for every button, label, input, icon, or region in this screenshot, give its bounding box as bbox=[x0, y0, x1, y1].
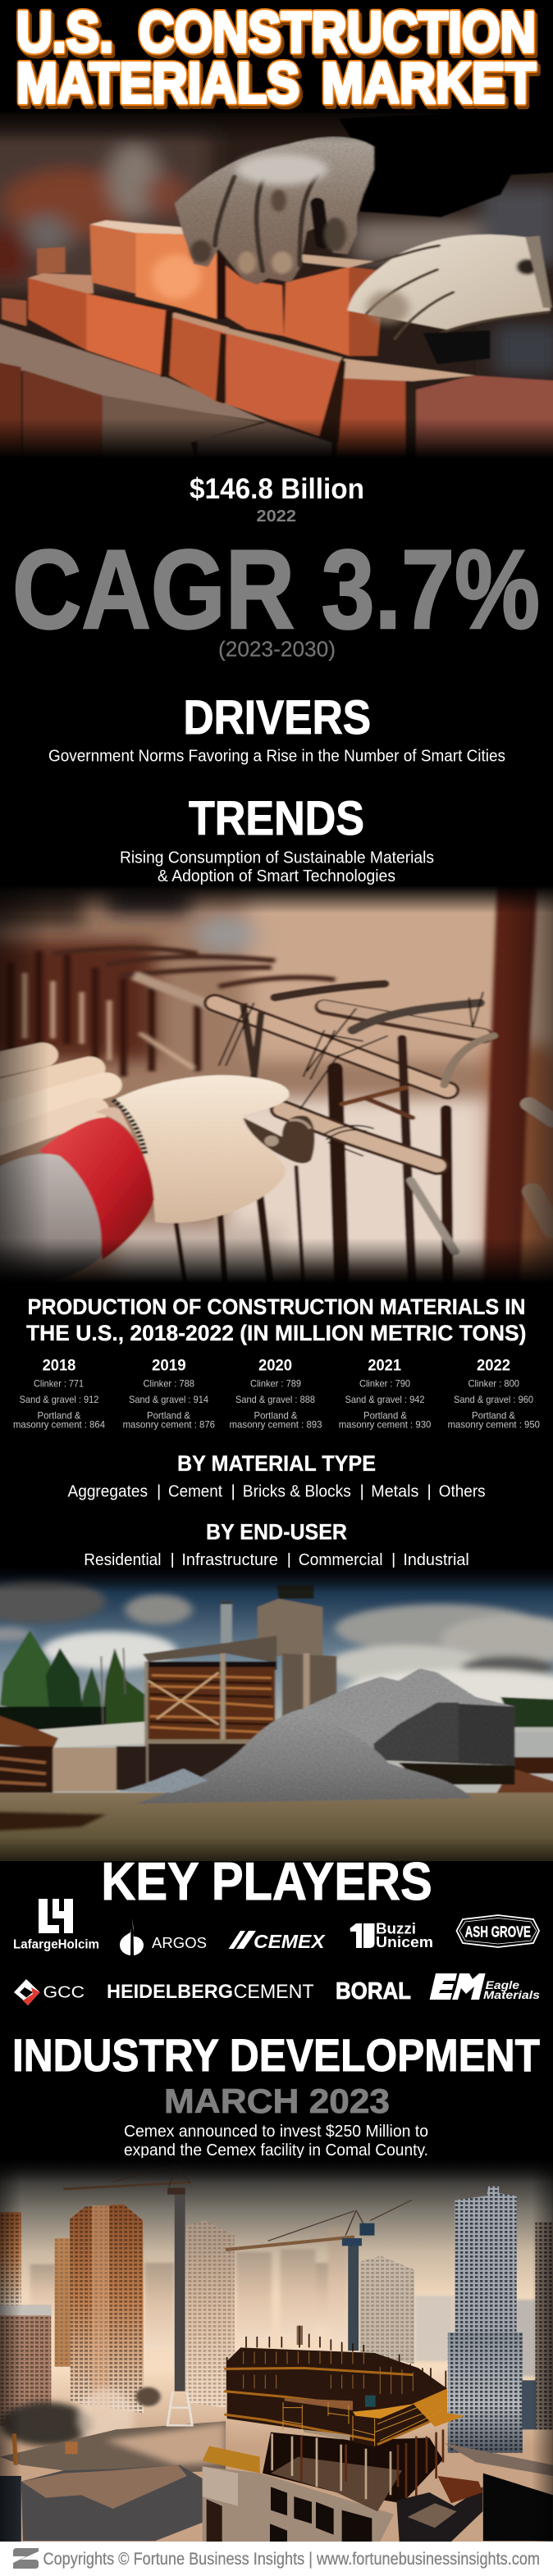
icon: Fortune Business Insights logo bbox=[13, 2548, 39, 2569]
open storey bbox=[263, 2433, 443, 2503]
end-user list: | bbox=[287, 1550, 291, 1569]
column: 2021 bbox=[339, 1358, 432, 1431]
logo: GCC: GCC bbox=[43, 1984, 85, 2002]
logo: Ash Grove bbox=[456, 1915, 539, 1947]
logo: Buzzi Unicem: Buzzi bbox=[376, 1921, 416, 1937]
right towers bbox=[455, 2187, 517, 2334]
development text: Cemex announced to invest $250 Million to bbox=[124, 2122, 428, 2141]
material type list: Aggregates bbox=[67, 1482, 148, 1501]
end-user list: Residential bbox=[84, 1550, 161, 1569]
trends text: Rising Consumption of Sustainable Materials bbox=[120, 848, 434, 867]
road bbox=[0, 2421, 226, 2476]
title: U.S. bbox=[19, 3, 116, 67]
development text: expand the Cemex facility in Comal County. bbox=[124, 2141, 428, 2160]
material type list: | bbox=[359, 1482, 364, 1501]
mid right tower bbox=[359, 2256, 414, 2364]
material type list: Cement bbox=[168, 1482, 222, 1501]
clouds bbox=[0, 1580, 553, 1708]
concrete base bbox=[203, 2466, 394, 2542]
heading: trends: TRENDS bbox=[189, 792, 364, 845]
right buildings bbox=[515, 1732, 553, 1757]
logo: Buzzi Unicem bbox=[350, 1921, 433, 1950]
drivers text: Government Norms Favoring a Rise in the Number of Smart Cities bbox=[48, 746, 505, 766]
material type list: | bbox=[231, 1482, 235, 1501]
left log stack bbox=[0, 1714, 58, 1749]
glove bbox=[117, 1075, 290, 1223]
far cage bbox=[11, 949, 335, 1076]
title: MATERIALS bbox=[16, 51, 299, 115]
heading: production chart: THE U.S., 2018-2022 (IN MILLION METRIC TONS) bbox=[26, 1321, 527, 1345]
low buildings bbox=[21, 2465, 203, 2541]
material type list: Bricks & Blocks bbox=[243, 1482, 351, 1501]
photo: material yard with gravel pile bbox=[0, 1568, 553, 1861]
trends text: & Adoption of Smart Technologies bbox=[158, 867, 395, 885]
silo tower bbox=[258, 1599, 322, 1656]
photo: gloved hands laying bricks bbox=[0, 102, 553, 480]
column: 2022: Portland & bbox=[472, 1410, 515, 1422]
gravel pile back bbox=[303, 1668, 515, 1748]
brick gaps bbox=[217, 248, 226, 319]
photo: gloved hand tying rebar bbox=[0, 880, 553, 1312]
market size value: $146.8 Billion bbox=[190, 473, 364, 505]
column: 2022 bbox=[448, 1358, 540, 1431]
hazy towers bbox=[30, 2228, 536, 2376]
dust and trees bbox=[0, 2402, 92, 2446]
logo: Argos bbox=[120, 1918, 207, 1955]
right glove bbox=[347, 234, 550, 330]
end-user list: | bbox=[171, 1550, 175, 1569]
heading: drivers: DRIVERS bbox=[184, 691, 371, 744]
trends text bbox=[120, 848, 434, 885]
column: 2021: Clinker : 790 bbox=[359, 1378, 410, 1390]
material type list: Others bbox=[439, 1482, 486, 1501]
column: 2019: 2019 bbox=[152, 1358, 186, 1375]
white shed bbox=[35, 1722, 144, 1748]
logo: GCC bbox=[14, 1979, 85, 2005]
gravel pile front bbox=[135, 1708, 473, 1804]
material type list: Metals bbox=[371, 1482, 418, 1501]
column: 2020 bbox=[230, 1358, 322, 1431]
left glove bbox=[175, 137, 374, 284]
red cuff bbox=[39, 1117, 154, 1260]
column: 2018: 2018 bbox=[43, 1358, 75, 1375]
CAGR period: (2023-2030) bbox=[218, 638, 336, 661]
logo: Argos: ARGOS bbox=[152, 1934, 207, 1951]
column: 2021: Sand & gravel : 942 bbox=[345, 1394, 425, 1405]
development text bbox=[124, 2122, 428, 2160]
logo: Eagle Materials: Eagle bbox=[486, 1978, 519, 1991]
end-user list bbox=[84, 1550, 469, 1569]
rebar bbox=[176, 984, 553, 1295]
left towers bbox=[0, 2212, 21, 2305]
post bbox=[483, 880, 537, 1295]
logo: Buzzi Unicem: Unicem bbox=[376, 1934, 433, 1950]
light gaps bbox=[244, 2351, 413, 2394]
wood stacks bbox=[149, 1667, 275, 1740]
column: 2022: Clinker : 800 bbox=[468, 1378, 519, 1390]
end-user list: Industrial bbox=[403, 1550, 469, 1569]
column: 2018: Portland & bbox=[38, 1410, 81, 1422]
column: 2020: Portland & bbox=[254, 1410, 298, 1422]
column: 2019: masonry cement : 876 bbox=[123, 1419, 215, 1431]
end-user list: Infrastructure bbox=[181, 1550, 278, 1569]
title: U.S. bbox=[16, 0, 113, 64]
ground bbox=[0, 1792, 553, 1861]
chimney bbox=[221, 1601, 232, 1643]
column: 2020: masonry cement : 893 bbox=[230, 1419, 322, 1431]
column: 2020: 2020 bbox=[258, 1358, 292, 1375]
material type list: | bbox=[157, 1482, 161, 1501]
title: MATERIALS bbox=[19, 54, 302, 118]
block stack bbox=[374, 1703, 515, 1765]
market size year: 2022 bbox=[256, 507, 296, 526]
footer bar bbox=[0, 2542, 553, 2576]
column: 2018: Sand & gravel : 912 bbox=[20, 1394, 98, 1405]
glove: back fingers bbox=[0, 1055, 106, 1144]
photo: high-rise construction site with cranes bbox=[0, 2156, 553, 2544]
material type list bbox=[67, 1482, 486, 1501]
logo: HeidelbergCement bbox=[107, 1981, 314, 2003]
column: 2020: Sand & gravel : 888 bbox=[235, 1394, 315, 1405]
column: 2018: masonry cement : 864 bbox=[13, 1419, 105, 1431]
logo: HeidelbergCement: CEMENT bbox=[234, 1981, 314, 2003]
material type list: | bbox=[427, 1482, 432, 1501]
pliers bbox=[244, 1116, 314, 1163]
logo: Cemex bbox=[229, 1931, 326, 1952]
column: 2022: 2022 bbox=[477, 1358, 510, 1375]
logo: LafargeHolcim: LafargeHolcim bbox=[13, 1938, 99, 1952]
logo: LafargeHolcim bbox=[13, 1899, 99, 1952]
sleeve bbox=[0, 1154, 101, 1295]
crane right bbox=[226, 2200, 412, 2351]
column: 2019: Sand & gravel : 914 bbox=[129, 1394, 208, 1405]
column: 2019: Clinker : 788 bbox=[143, 1378, 194, 1390]
column: 2021: 2021 bbox=[368, 1358, 401, 1375]
heading: production chart: PRODUCTION OF CONSTRUCTION MATERIALS IN bbox=[28, 1295, 525, 1319]
scaffold building bbox=[203, 2326, 482, 2542]
column: 2018 bbox=[13, 1358, 105, 1431]
end-user list: Commercial bbox=[299, 1550, 382, 1569]
column: 2022: masonry cement : 950 bbox=[448, 1419, 540, 1431]
column: 2019: Portland & bbox=[147, 1410, 190, 1422]
logo: Eagle Materials bbox=[430, 1973, 540, 2001]
road right bbox=[445, 2443, 553, 2476]
column: 2018: Clinker : 771 bbox=[34, 1378, 84, 1390]
logo: HeidelbergCement: HEIDELBERG bbox=[107, 1981, 233, 2003]
logo: Eagle Materials: Materials bbox=[483, 1988, 540, 2001]
lower brick courses bbox=[0, 322, 268, 422]
column: 2020: Clinker : 789 bbox=[250, 1378, 301, 1390]
column: 2019 bbox=[123, 1358, 215, 1431]
sleeve bbox=[339, 107, 553, 217]
crane left bbox=[63, 2164, 192, 2425]
logo: Cemex: CEMEX bbox=[254, 1931, 326, 1952]
heading: production chart bbox=[26, 1295, 527, 1345]
heading: by material type: BY MATERIAL TYPE bbox=[177, 1451, 376, 1476]
column: 2022: Sand & gravel : 960 bbox=[454, 1394, 533, 1405]
column: 2021: masonry cement : 930 bbox=[339, 1419, 432, 1431]
development date: MARCH 2023 bbox=[164, 2082, 390, 2120]
wire ties bbox=[218, 992, 483, 1156]
end-user list: | bbox=[391, 1550, 395, 1569]
scaffold frame bbox=[227, 2347, 447, 2447]
heading: key players: KEY PLAYERS bbox=[101, 1851, 432, 1911]
column: 2021: Portland & bbox=[363, 1410, 407, 1422]
trees bbox=[0, 1630, 553, 1727]
title bbox=[16, 0, 538, 118]
heading: by end-user: BY END-USER bbox=[206, 1520, 347, 1545]
logo: Boral: BORAL bbox=[336, 1978, 411, 2005]
title: U.S. bbox=[16, 0, 113, 64]
title: MATERIALS bbox=[16, 51, 299, 115]
shed roof bbox=[143, 1636, 276, 1663]
